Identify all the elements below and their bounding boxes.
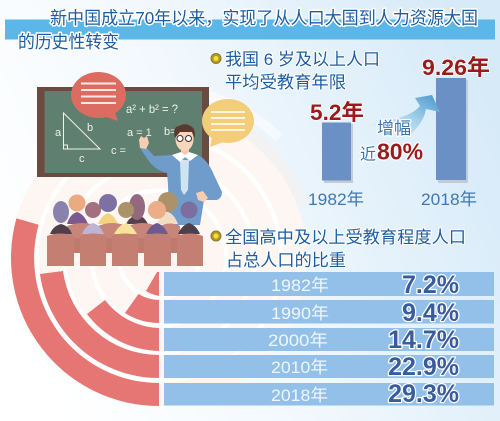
- illustration: teacher at chalkboard: [37, 72, 254, 266]
- title text: 的历史性转变: [18, 32, 119, 52]
- ring 2018: [11, 218, 159, 406]
- radial chart: education share rings: [11, 218, 159, 406]
- chalkboard: a = 1: [127, 127, 152, 139]
- heading: average years of education: 平均受教育年限: [225, 73, 346, 92]
- shirt: [180, 160, 189, 195]
- chalkboard: a² + b² = ?: [126, 102, 178, 116]
- table: share by year: [164, 271, 494, 408]
- row 1982: [164, 271, 494, 299]
- value 5.2: 5.2年: [310, 100, 364, 125]
- row 2000: 14.7%: [388, 326, 459, 354]
- value 9.26: 9.26年: [422, 55, 490, 80]
- row 2000: 2000年: [268, 331, 328, 350]
- chalkboard: b=: [164, 126, 177, 138]
- chalkboard: c: [79, 153, 85, 165]
- body: [140, 147, 222, 225]
- ring 1982: [146, 272, 159, 296]
- arrow: growth: [357, 95, 440, 135]
- collar: [172, 152, 198, 162]
- ring 1990: [125, 294, 159, 323]
- heading: share of population with high school education: [211, 228, 466, 270]
- ring 2000: [87, 300, 159, 351]
- row 2010: [164, 353, 494, 381]
- title band: [5, 8, 495, 52]
- row 2018: [164, 380, 494, 408]
- row 1982: 1982年: [271, 276, 329, 295]
- hand: [139, 136, 149, 149]
- label 增幅: 增幅: [377, 119, 411, 138]
- back seats: [67, 223, 180, 240]
- triangle diagram: [64, 113, 100, 149]
- bar 1982: [322, 122, 353, 183]
- row 2010: 2010年: [271, 358, 328, 377]
- row 1990: [164, 299, 494, 327]
- chalkboard: c =: [111, 145, 126, 157]
- teacher: [139, 124, 222, 225]
- heading: share of population with high school education: 全国高中及以上受教育程度人口: [225, 228, 466, 247]
- heading: average years of education: 我国 6 岁及以上人口: [225, 50, 380, 69]
- bar chart: years of education: [308, 55, 490, 209]
- head: [176, 127, 194, 151]
- row 1990: 1990年: [271, 304, 329, 323]
- front seats: [47, 234, 203, 266]
- red speech bubble: [71, 72, 126, 121]
- audience: [47, 192, 203, 266]
- row 1990: 9.4%: [402, 299, 459, 327]
- bar 2018: [436, 78, 468, 183]
- year 2018: 2018年: [421, 190, 477, 209]
- row 2018: 2018年: [271, 386, 328, 405]
- front row: [50, 224, 72, 234]
- heading: share of population with high school education: 占总人口的比重: [226, 251, 346, 270]
- yellow speech bubble: [202, 99, 254, 147]
- label 近80%: 近80%: [360, 138, 423, 164]
- row 2000: [164, 326, 494, 354]
- row 2010: 22.9%: [388, 353, 459, 381]
- ring 2010: [40, 271, 159, 378]
- chalkboard: b: [87, 122, 93, 134]
- chalkboard: a: [55, 127, 62, 139]
- chalkboard: [37, 87, 209, 177]
- title text: 新中国成立70年以来，实现了从人口大国到人力资源大国: [50, 8, 478, 28]
- year 1982: 1982年: [308, 190, 364, 209]
- other hand: [196, 191, 208, 202]
- row 1982: 7.2%: [402, 271, 459, 299]
- row 2018: 29.3%: [388, 380, 459, 408]
- back row: [67, 212, 88, 224]
- heading: average years of education: [211, 50, 380, 92]
